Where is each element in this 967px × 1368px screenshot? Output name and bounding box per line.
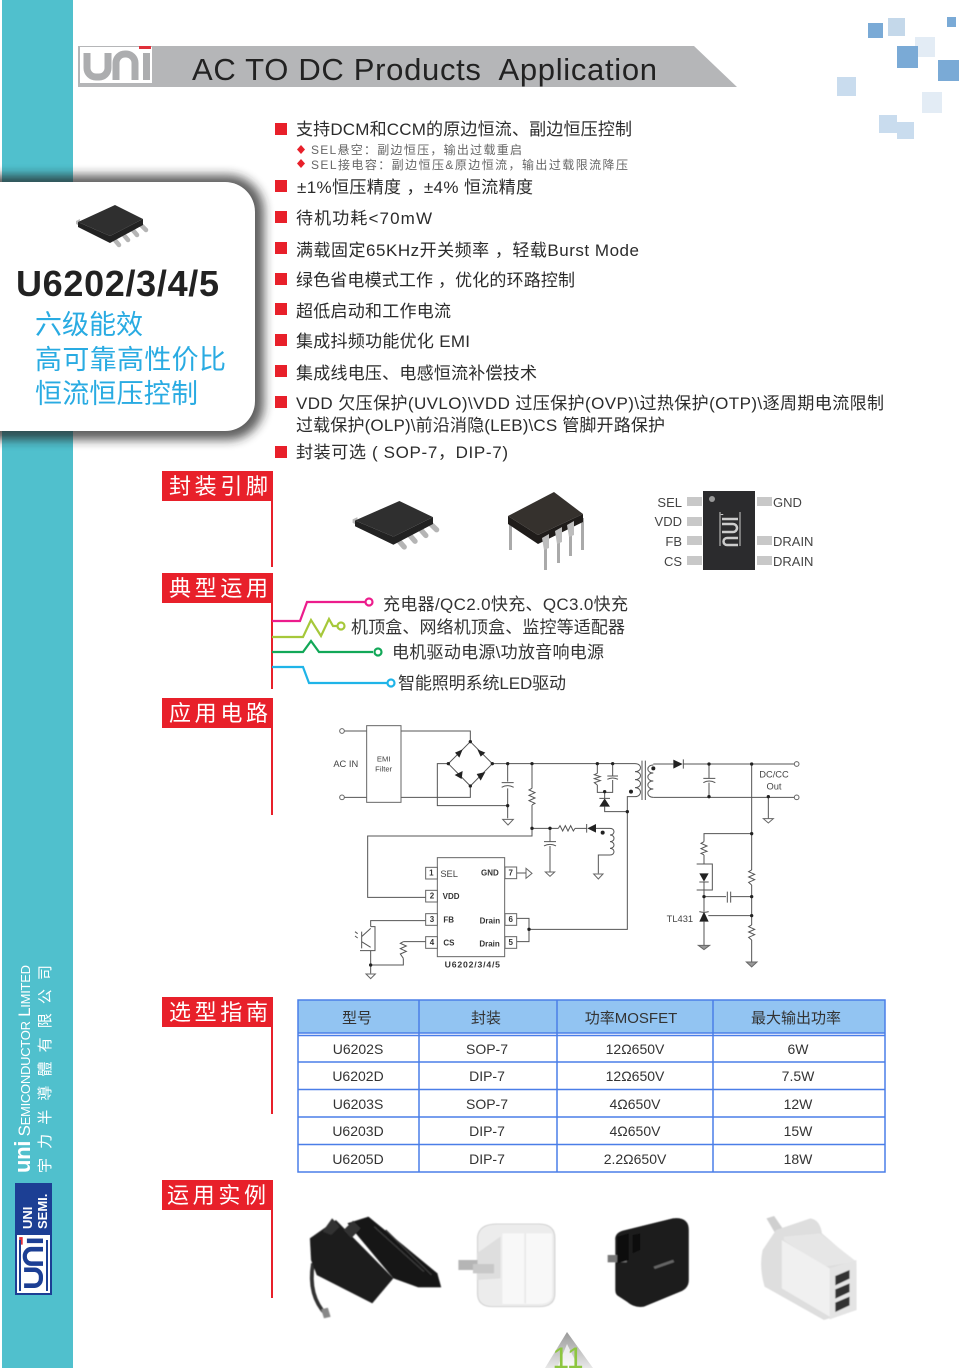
icon: DIP-7 package <box>508 492 584 570</box>
feature list: 支持DCM和CCM的原边恒流、副边恒压控制 <box>296 120 632 139</box>
table header: 封装 <box>471 1010 501 1027</box>
company name <box>10 965 54 1173</box>
table rows: U6202S <box>333 1041 383 1057</box>
controller chip: SEL <box>440 869 458 879</box>
controller chip: Drain <box>479 940 500 949</box>
chip logo <box>720 512 740 546</box>
table rows <box>332 1041 815 1167</box>
product slogans: 恒流恒压控制 <box>35 379 198 409</box>
section: application examples <box>162 1180 273 1298</box>
controller chip: 5 <box>508 938 513 947</box>
section: package pins: 封装引脚 <box>169 474 268 499</box>
logo: uni semi: UNI <box>20 1207 35 1229</box>
table header: 型号 <box>342 1010 372 1027</box>
table rows: DIP-7 <box>469 1151 505 1167</box>
section: selection guide: 选型指南 <box>169 1000 268 1025</box>
feature list: 集成抖频功能优化 EMI <box>296 332 470 351</box>
logo: uni semi: SEMI. <box>35 1194 50 1229</box>
table rows: 12Ω650V <box>606 1068 665 1084</box>
table rows: U6202D <box>332 1068 384 1084</box>
feature list: 满载固定65KHz开关频率 ，轻载Burst Mode <box>296 241 639 260</box>
controller chip: 6 <box>508 915 513 924</box>
icon: white adapter <box>458 1224 555 1307</box>
table rows: SOP-7 <box>466 1096 508 1112</box>
table rows: 6W <box>788 1041 809 1057</box>
table rows: 7.5W <box>782 1068 815 1084</box>
application labels: 充电器/QC2.0快充、QC3.0快充 <box>383 595 628 614</box>
output terminals: Out <box>766 781 782 791</box>
selection table <box>298 1000 885 1172</box>
product name: U6202/3/4/5 <box>16 263 219 304</box>
pin labels: VDD <box>655 514 682 529</box>
lighting line <box>272 667 394 686</box>
output terminals: TL431 <box>667 914 693 924</box>
table rows: DIP-7 <box>469 1068 505 1084</box>
application labels: 机顶盒、网络机顶盒、监控等适配器 <box>351 618 625 637</box>
output terminals <box>667 762 799 924</box>
table rows: 4Ω650V <box>610 1096 661 1112</box>
junction dots <box>369 740 770 967</box>
controller chip: 4 <box>430 938 435 947</box>
transformer and coils <box>610 761 653 855</box>
motor line <box>272 641 382 656</box>
table header: 功率MOSFET <box>585 1010 677 1027</box>
table rows: 18W <box>784 1151 813 1167</box>
title: AC TO DC Products Application <box>192 52 657 87</box>
section: application circuit: 应用电路 <box>169 701 268 726</box>
pin labels: DRAIN <box>773 534 813 549</box>
feature list: SEL接电容：副边恒压&原边恒流，输出过载限流降压 <box>311 157 628 172</box>
icon: black adapter with cable <box>310 1217 441 1318</box>
icon: SOP chip <box>76 205 146 245</box>
circuit schematic <box>333 726 799 979</box>
product slogans <box>35 310 226 409</box>
controller chip: VDD <box>443 892 460 901</box>
ac input: EMI <box>377 755 390 764</box>
table rows: 2.2Ω650V <box>604 1151 667 1167</box>
charger line <box>272 598 372 621</box>
application lines <box>272 598 394 686</box>
logo: uni <box>80 46 152 83</box>
table rows: U6203S <box>333 1096 383 1112</box>
icon: white UK plug USB charger <box>761 1216 856 1320</box>
company name: 宇力半導體有限公司 <box>37 965 54 1173</box>
feature list: 绿色省电模式工作 ，优化的环路控制 <box>296 271 575 290</box>
controller chip: CS <box>443 939 455 948</box>
controller chip: U6202/3/4/5 <box>445 959 500 969</box>
resistors <box>400 773 755 958</box>
pin labels: FB <box>665 534 682 549</box>
output terminals: DC/CC <box>759 769 789 779</box>
rectifier bridge <box>455 749 485 781</box>
section: application examples: 运用实例 <box>167 1183 266 1208</box>
pin labels: GND <box>773 495 802 510</box>
product slogans: 六级能效 <box>35 310 143 340</box>
controller chip: FB <box>443 916 454 925</box>
logo: uni semi <box>15 1183 52 1295</box>
application labels: 电机驱动电源\功放音响电源 <box>392 643 604 662</box>
icon: SOP-7 package <box>353 501 437 547</box>
section: application circuit <box>162 698 273 815</box>
section: package pins <box>162 471 273 567</box>
feature list <box>275 120 884 462</box>
capacitors <box>502 776 731 903</box>
feature list: SEL悬空：副边恒压，输出过载重启 <box>311 142 522 157</box>
controller chip <box>426 858 517 969</box>
product slogans: 高可靠高性价比 <box>35 345 226 375</box>
pin labels: SEL <box>657 495 682 510</box>
charger photos <box>310 1216 856 1320</box>
table rows: DIP-7 <box>469 1123 505 1139</box>
controller chip: GND <box>481 868 499 877</box>
section: typical applications: 典型运用 <box>169 576 268 601</box>
application labels <box>351 595 628 693</box>
optocoupler transistor <box>355 927 375 951</box>
feature list: 封装可选 ( SOP-7，DIP-7) <box>296 443 508 462</box>
feature list: 待机功耗<70mW <box>296 209 432 228</box>
panel: product summary <box>0 175 264 440</box>
table rows: U6205D <box>332 1151 384 1167</box>
feature list: VDD 欠压保护(UVLO)\VDD 过压保护(OVP)\过热保护(OTP)\逐周期电流限制 <box>296 394 884 413</box>
pinout diagram <box>655 491 813 570</box>
controller chip: 7 <box>508 868 513 877</box>
feature list: 超低启动和工作电流 <box>296 302 451 321</box>
pin labels <box>655 495 813 569</box>
controller chip: 3 <box>430 915 435 924</box>
pin labels: DRAIN <box>773 554 813 569</box>
table rows: 12W <box>784 1096 813 1112</box>
company name: uni SEMICONDUCTOR LIMITED <box>10 965 35 1173</box>
header band <box>78 46 737 87</box>
page number <box>545 1332 593 1368</box>
feature list: ±1%恒压精度 ，±4% 恒流精度 <box>297 178 533 197</box>
pin labels: CS <box>664 554 682 569</box>
table header <box>298 1000 885 1033</box>
ac input: AC IN <box>333 759 358 769</box>
section: typical applications <box>162 573 273 689</box>
ac input <box>333 726 401 802</box>
section: selection guide <box>162 997 273 1114</box>
diodes <box>587 760 709 922</box>
grounds <box>366 819 773 979</box>
table rows: U6203D <box>332 1123 384 1139</box>
controller chip: 2 <box>430 892 435 901</box>
decorative squares <box>837 17 959 139</box>
feature list: 过载保护(OLP)\前沿消隐(LEB)\CS 管脚开路保护 <box>296 416 665 435</box>
table rows: 15W <box>784 1123 813 1139</box>
ac input: Filter <box>375 765 393 774</box>
table rows: SOP-7 <box>466 1041 508 1057</box>
controller chip: Drain <box>480 916 500 925</box>
table rows: 12Ω650V <box>606 1041 665 1057</box>
feature list: 集成线电压、电感恒流补偿技术 <box>296 364 537 383</box>
sidebar <box>2 0 73 1368</box>
application labels: 智能照明系统LED驱动 <box>398 674 566 693</box>
table rows: 4Ω650V <box>610 1123 661 1139</box>
icon: black USB adapter <box>608 1218 689 1307</box>
set-top box line <box>272 619 344 637</box>
controller chip: 1 <box>429 869 434 878</box>
table header: 最大输出功率 <box>751 1010 841 1027</box>
